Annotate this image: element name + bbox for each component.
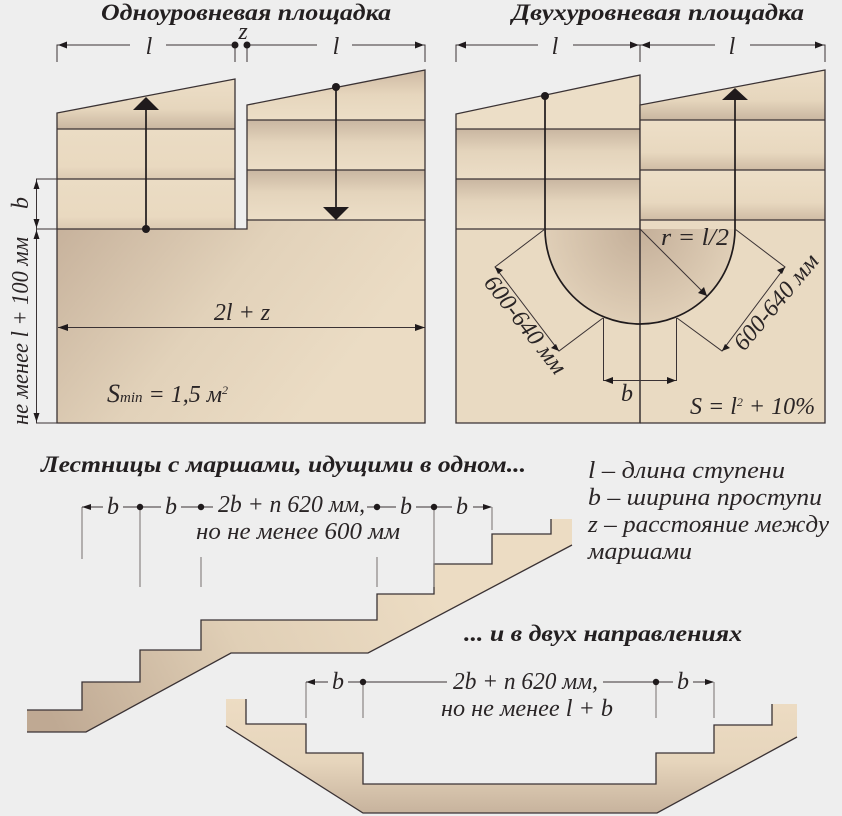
dimensions: one direction staircase: b bbox=[107, 494, 119, 520]
right flight of steps bbox=[247, 70, 425, 220]
dimensions: one direction staircase: b bbox=[456, 494, 468, 520]
staircase: two directions bbox=[226, 699, 797, 813]
landing floor bbox=[57, 220, 425, 423]
legend: маршами bbox=[587, 539, 692, 565]
semicircular winder bbox=[545, 229, 735, 324]
dimension: radius bbox=[640, 225, 729, 296]
arrow: going down bbox=[323, 83, 349, 220]
dimension: 2l + z bbox=[58, 300, 425, 331]
dimension: b and min length bbox=[8, 179, 57, 425]
dimensions: two directions staircase bbox=[306, 669, 714, 722]
dimension: b and min length: не менее l + 100 мм bbox=[8, 237, 34, 425]
dimension: b bbox=[604, 318, 676, 407]
dimension row: l z l bbox=[57, 19, 425, 62]
formula: minimum area: 2 bbox=[222, 383, 228, 397]
formula: area: 2 bbox=[737, 395, 743, 409]
dimensions: two directions staircase: 2b + n 620 мм, bbox=[453, 669, 598, 695]
dimensions: two directions staircase: но не менее l + b bbox=[441, 696, 613, 722]
heading: single-level landing: Одноуровневая площадка bbox=[101, 0, 391, 25]
legend: z – расстояние между bbox=[587, 512, 829, 538]
dimension: right 600-640 mm: 600-640 мм bbox=[729, 249, 824, 356]
dimension row: l l: l bbox=[729, 34, 736, 60]
dimension: right 600-640 mm bbox=[677, 229, 824, 356]
legend: b – ширина проступи bbox=[588, 485, 822, 511]
heading: flights in two directions: ... и в двух направлениях bbox=[464, 621, 742, 646]
dimension row: l z l: l bbox=[333, 34, 340, 60]
formula: area: + 10% bbox=[743, 394, 815, 420]
dimension: b and min length: b bbox=[8, 197, 34, 209]
dimensions: one direction staircase: b bbox=[400, 494, 412, 520]
dimension: radius: r = l/2 bbox=[661, 225, 729, 251]
panel: two-level landing bbox=[456, 0, 825, 423]
arrow: going up bbox=[133, 97, 159, 233]
dimension row: l l bbox=[456, 34, 825, 62]
left flight of steps bbox=[456, 75, 640, 423]
heading: two-level landing: Двухуровневая площадка bbox=[510, 0, 804, 25]
walking line with start dot and arrow bbox=[541, 88, 748, 324]
panel: single-level landing bbox=[8, 0, 425, 425]
right flight of steps bbox=[640, 70, 825, 423]
dimension: 2l + z: 2l + z bbox=[214, 300, 271, 326]
legend bbox=[587, 458, 829, 565]
staircase: one direction bbox=[27, 519, 572, 732]
left flight of steps bbox=[57, 79, 235, 229]
dimension row: l z l: z bbox=[237, 19, 248, 45]
dimension row: l z l: l bbox=[146, 34, 153, 60]
dimension row: l l: l bbox=[552, 34, 559, 60]
heading: flights in one direction: Лестницы с маршами, идущими в одном... bbox=[40, 452, 526, 477]
dimensions: one direction staircase: но не менее 600 мм bbox=[196, 519, 400, 545]
dimensions: one direction staircase bbox=[82, 492, 492, 587]
dimension: left 600-640 mm bbox=[478, 229, 603, 380]
formula: area: S = l bbox=[690, 394, 737, 420]
dimension: left 600-640 mm: 600-640 мм bbox=[478, 271, 571, 380]
legend: l – длина ступени bbox=[588, 458, 785, 484]
lower area floor bbox=[456, 220, 825, 423]
dimensions: two directions staircase: b bbox=[332, 669, 344, 695]
dimensions: one direction staircase: b bbox=[165, 494, 177, 520]
dimensions: one direction staircase: 2b + n 620 мм, bbox=[218, 492, 365, 518]
dimension: b: b bbox=[621, 381, 633, 407]
dimensions: two directions staircase: b bbox=[677, 669, 689, 695]
formula: minimum area: Smin = 1,5 м bbox=[107, 379, 222, 408]
